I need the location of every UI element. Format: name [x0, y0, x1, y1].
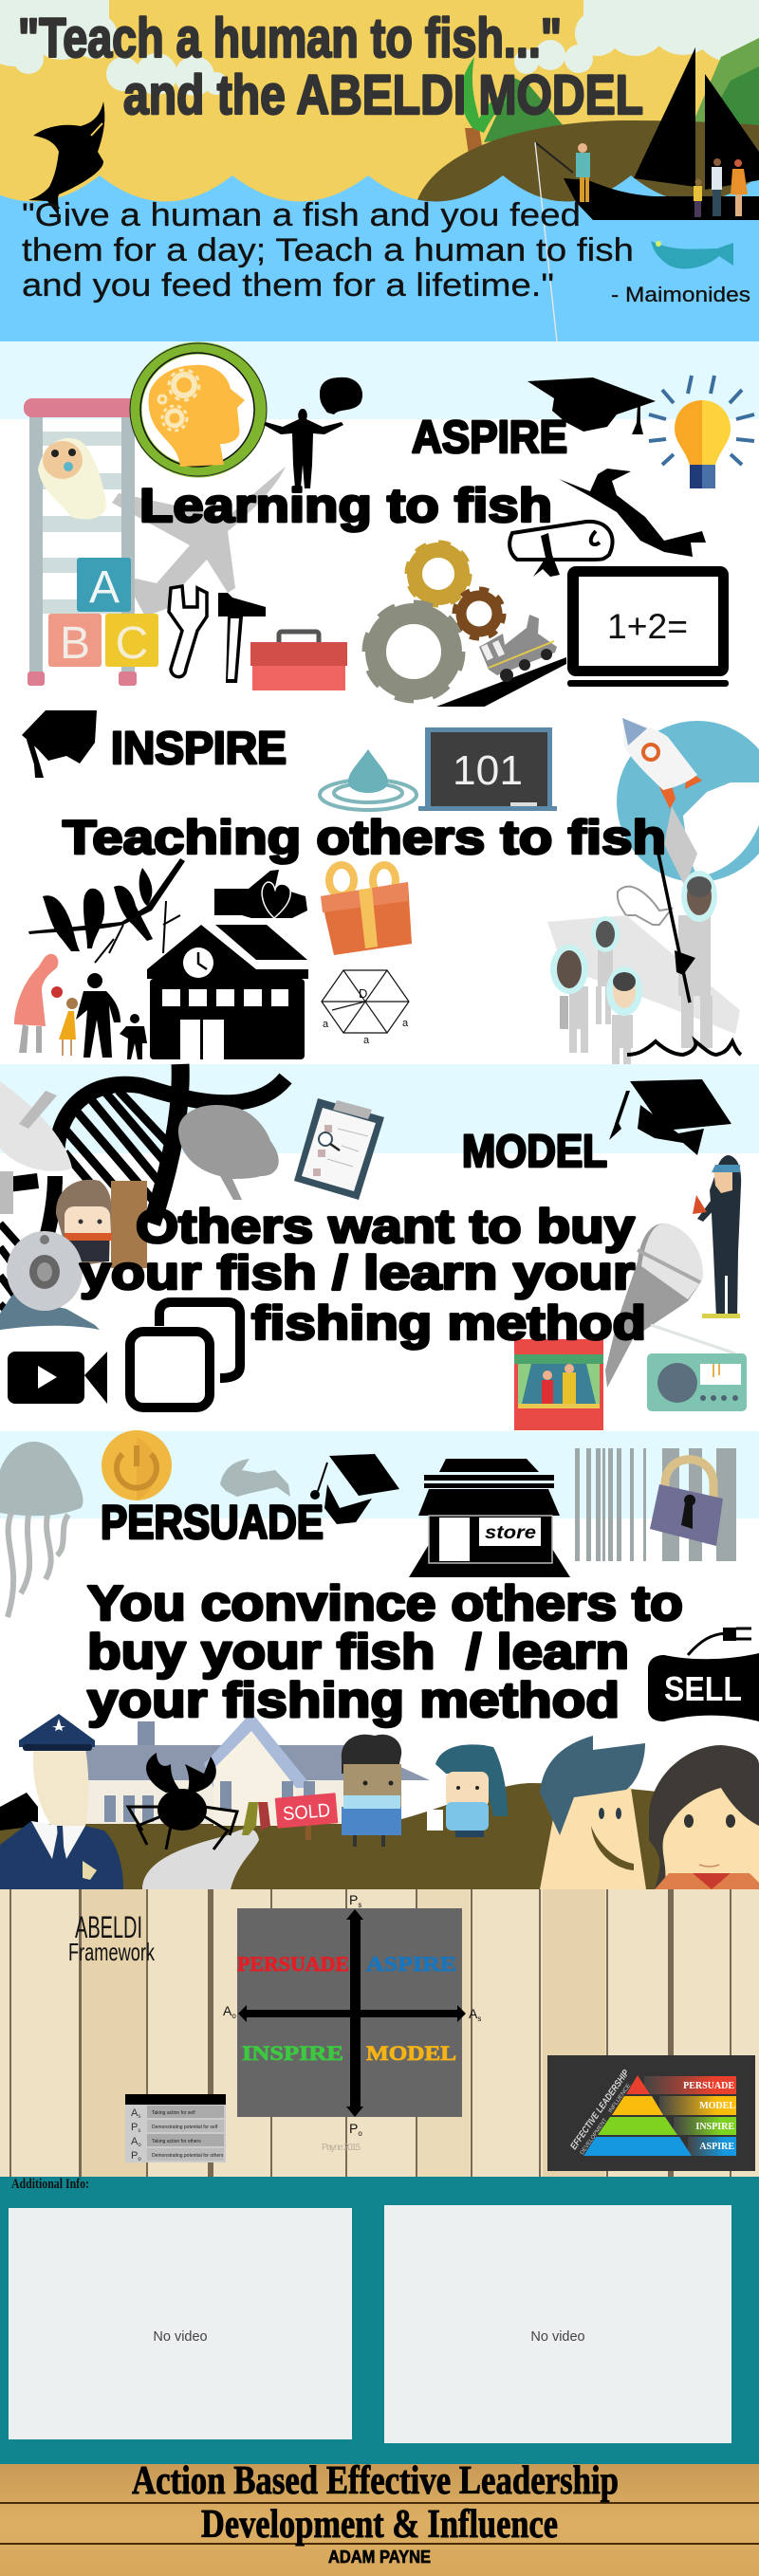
heading: model: MODEL [462, 1127, 607, 1177]
icon: video camera [8, 1352, 107, 1404]
table: legend: P [131, 2150, 138, 2162]
icon: waves outline [627, 1041, 741, 1055]
text: you convince others: You convince others to [87, 1576, 683, 1631]
text: you convince others: buy your fish / learn [87, 1625, 629, 1680]
icon: baby [38, 438, 106, 520]
icon: train on rail [429, 615, 566, 709]
chart: action potential quadrant: o [358, 2129, 362, 2138]
icon: swimmer [559, 469, 706, 557]
table: legend: A [131, 2107, 138, 2119]
icon: laptop: 1+2= [607, 607, 688, 646]
chart: action potential quadrant: P [349, 1892, 358, 1907]
chart: leadership pyramid [547, 2055, 755, 2171]
icon: alphabet blocks: B [60, 618, 90, 669]
icon: sold sign: SOLD [282, 1800, 331, 1825]
icon: radio [647, 1325, 747, 1411]
icon: hexagon diagram: a [402, 1018, 409, 1029]
icon: school [147, 925, 308, 1059]
quote: them for a day; Teach a human to fish [22, 232, 634, 268]
icon: water drop [320, 749, 417, 810]
text: learning to fish: Learning to fish [139, 479, 552, 532]
icon: store: store [485, 1523, 536, 1543]
chart: action potential quadrant: o [231, 2012, 236, 2020]
icon: fish outline [618, 887, 672, 925]
panel: aspire [0, 341, 759, 709]
panel: model [0, 1064, 759, 1430]
video placeholder left [9, 2208, 352, 2439]
chart: leadership pyramid: ASPIRE [699, 2142, 734, 2152]
icon: ladder [24, 398, 138, 686]
icon: sell tag with plug: SELL [664, 1669, 742, 1708]
text: abeldi framework label: ABELDI [75, 1910, 142, 1944]
quote: "Give a human a fish and you feed [22, 197, 581, 233]
icon: graduation cap [310, 1454, 399, 1524]
icon: alphabet blocks: A [89, 562, 120, 613]
title [18, 8, 643, 126]
icon: puppet theater [514, 1339, 603, 1430]
icon: gift [321, 865, 412, 955]
panel: inspire [0, 707, 759, 1064]
text: others want to buy: fishing method [251, 1297, 646, 1350]
icon: wrench [169, 586, 207, 677]
table: legend: P [131, 2122, 138, 2133]
text: teaching others to fish: Teaching others to fish [63, 811, 666, 864]
icon: man in apron [342, 1735, 401, 1847]
chart: action potential quadrant: A [469, 2006, 477, 2021]
icon: waves [0, 175, 759, 341]
table: legend: o [138, 2143, 141, 2148]
icon: microphone [605, 1224, 703, 1388]
icon: satellite dish [0, 1081, 72, 1214]
icon: road [142, 1829, 259, 1889]
chart: action potential quadrant: PERSUADE [237, 1952, 349, 1976]
icon: barcode [575, 1448, 736, 1561]
icon: fisherman [535, 142, 590, 202]
icon: diploma [509, 522, 613, 577]
icon: power button [102, 1430, 172, 1500]
icon: crab black [128, 1753, 237, 1849]
text: footer title [132, 2459, 619, 2547]
chart: action potential quadrant: s [358, 1901, 361, 1909]
icon: palm tree [460, 57, 517, 169]
icon: rocket [617, 718, 759, 887]
icon: police officer [0, 1714, 123, 1889]
icon: sailboat [564, 47, 759, 220]
icon: boat and astronauts [547, 871, 740, 1064]
icon: dna strand [0, 1064, 286, 1314]
icon: hand with heart [214, 870, 307, 918]
text: others want to buy: your fish / learn your [80, 1246, 635, 1299]
icon: woman with ponytail [427, 1744, 508, 1837]
icon: hexagon diagram: a [363, 1035, 370, 1046]
icon: graduation cap [528, 377, 656, 434]
icon: alphabet blocks: C [116, 618, 148, 669]
icon: light bulb [649, 376, 754, 488]
text: author: ADAM PAYNE [328, 2548, 431, 2567]
heading: additional info: Additional Info: [11, 2177, 89, 2192]
icon: toolbox [250, 632, 347, 690]
chart: leadership pyramid: INSPIRE [695, 2122, 734, 2132]
icon: chalkboard 101 [418, 727, 557, 811]
icon: plane silhouette [112, 467, 286, 616]
panel: abeldi framework [0, 1889, 759, 2177]
icon: shark [28, 101, 104, 216]
panel: footer [0, 2459, 759, 2576]
quote [22, 197, 750, 306]
icon: family [694, 158, 748, 217]
icon: big smiling man [540, 1736, 646, 1889]
video placeholder right: No video [530, 2329, 585, 2345]
icon: graduation cap [22, 710, 97, 778]
table: legend [125, 2094, 226, 2162]
icon: diver [693, 1155, 741, 1318]
icon: crab grey [220, 1459, 290, 1497]
title: and the ABELDI MODEL [123, 64, 643, 126]
panel: header [0, 0, 759, 341]
icon: chalkboard 101: 101 [453, 747, 523, 794]
icon: harpoon [658, 854, 695, 1003]
table: legend: s [138, 2114, 140, 2120]
icon: sell tag with plug [648, 1628, 759, 1721]
icon: fish [651, 241, 733, 268]
chart: action potential quadrant: Payne 2015 [322, 2143, 361, 2153]
table: legend: Taking action for self [152, 2110, 195, 2116]
icon: cartoon man with door [56, 1180, 147, 1268]
video placeholder left: No video [153, 2329, 208, 2345]
icon: webcam [0, 1231, 100, 1330]
text: you convince others [87, 1576, 683, 1728]
chart: action potential quadrant: P [349, 2121, 358, 2136]
heading: inspire: INSPIRE [111, 724, 287, 774]
icon: hexagon diagram [322, 970, 409, 1046]
icon: sold sign [275, 1793, 338, 1840]
table: legend: s [138, 2128, 140, 2134]
icon: person with brain [264, 377, 362, 488]
icon: jellyfish [0, 1442, 83, 1617]
icon: hammer [218, 593, 266, 683]
chart: leadership pyramid: DEVELOPMENT [580, 2118, 609, 2156]
icon: family silhouette [14, 954, 147, 1059]
icon: hexagon diagram: a [323, 1019, 329, 1030]
table: legend: Taking action for others [152, 2139, 201, 2144]
title: "Teach a human to fish..." [18, 8, 562, 69]
chart: leadership pyramid: PERSUADE [683, 2081, 734, 2091]
icon: big woman [649, 1745, 759, 1889]
icon: gears [366, 543, 504, 699]
icon: laptop [567, 566, 729, 687]
table: legend: Demonstrating potential for self [152, 2125, 218, 2130]
table: legend: Demonstrating potential for others [152, 2153, 224, 2159]
heading: aspire: ASPIRE [412, 413, 567, 463]
chart: action potential quadrant [223, 1892, 481, 2153]
chart: action potential quadrant: s [477, 2015, 481, 2023]
text: abeldi framework label [68, 1910, 156, 1966]
text: others want to buy: Others want to buy [136, 1200, 635, 1253]
quote: and you feed them for a lifetime." [22, 267, 554, 304]
text: footer title: Development & Influence [201, 2503, 558, 2547]
icon: ground hill [0, 1783, 759, 1889]
text: you convince others: your fishing method [87, 1673, 620, 1728]
panel: persuade [0, 1430, 759, 1889]
text: footer title: Action Based Effective Leadership [132, 2459, 619, 2503]
text: others want to buy [80, 1200, 646, 1350]
chart: action potential quadrant: ASPIRE [366, 1952, 456, 1976]
icon: fishing line [535, 142, 557, 341]
chart: leadership pyramid: INFLUENCE [608, 2083, 632, 2114]
text: abeldi framework label: Framework [68, 1938, 156, 1966]
icon: head with gears [130, 343, 267, 476]
quote: - Maimonides [611, 283, 750, 306]
icon: graduation cap [609, 1079, 731, 1155]
icon: clouds [0, 0, 759, 96]
icon: hexagon diagram: D [359, 986, 367, 1001]
chart: action potential quadrant: MODEL [366, 2041, 456, 2065]
chart: action potential quadrant: A [223, 2003, 231, 2018]
icon: clipboard [294, 1098, 384, 1200]
chart: leadership pyramid: EFFECTIVE LEADERSHIP [568, 2068, 632, 2152]
video placeholder right [384, 2205, 731, 2443]
icon: copy squares [130, 1302, 240, 1408]
chart: leadership pyramid: MODEL [699, 2101, 735, 2111]
icon: brain [178, 1105, 279, 1200]
icon: mountains [484, 38, 759, 142]
icon: store [409, 1459, 570, 1577]
panel: additional info [0, 2177, 759, 2464]
icon: alphabet blocks [48, 558, 158, 669]
icon: couple walking [242, 1802, 270, 1835]
heading: persuade: PERSUADE [101, 1496, 324, 1549]
icon: birds on branch [28, 858, 185, 963]
chart: action potential quadrant: INSPIRE [242, 2041, 343, 2065]
table: legend: A [131, 2136, 138, 2147]
icon: island [414, 120, 759, 213]
icon: padlock [650, 1460, 723, 1546]
icon: house [81, 1712, 430, 1826]
table: legend: o [138, 2157, 141, 2162]
